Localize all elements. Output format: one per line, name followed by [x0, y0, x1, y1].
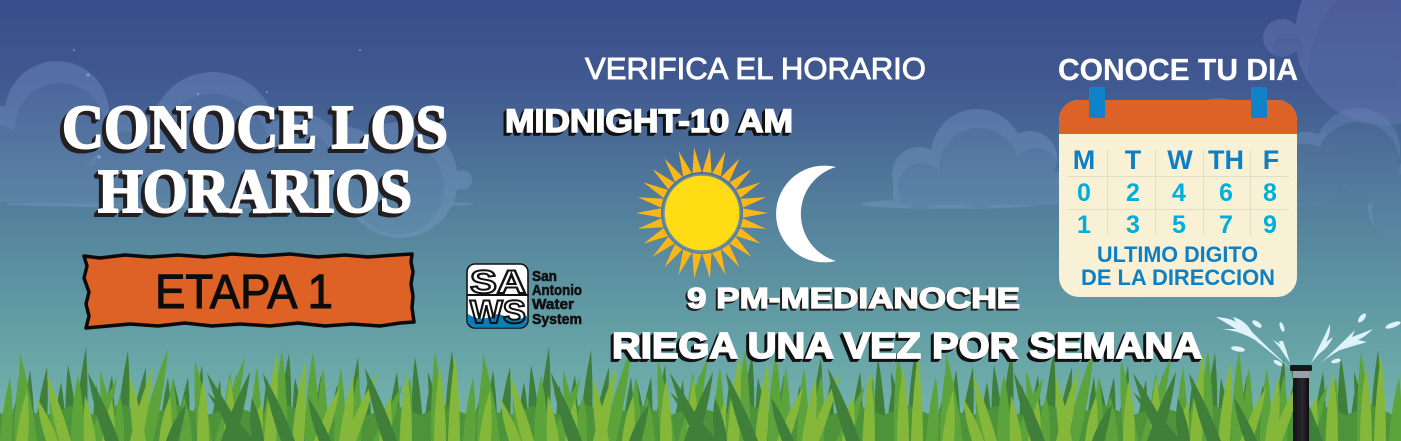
badge shape — [84, 254, 414, 328]
logo wordmark — [532, 268, 582, 328]
digits row one: 0 — [1077, 179, 1091, 207]
digits row two: 1 — [1077, 211, 1091, 239]
title: HORARIOS — [98, 158, 412, 226]
weekday row: W — [1167, 145, 1193, 175]
label: morning hours: MIDNIGHT-10 AM — [505, 103, 793, 139]
logo mark — [467, 264, 528, 330]
cloud: top right — [1263, 0, 1401, 187]
logo mark: WS — [470, 294, 526, 330]
calendar note: ULTIMO DIGITO — [1097, 242, 1258, 267]
icon: moon — [776, 166, 836, 262]
digits row one: 4 — [1172, 179, 1186, 207]
logo mark: SA — [470, 264, 526, 300]
calendar binding rings — [1089, 87, 1267, 118]
logo wordmark: Water — [532, 296, 574, 313]
digits row two: 9 — [1263, 211, 1277, 239]
label: water once a week: RIEGA UNA VEZ POR SEMANA — [612, 325, 1202, 366]
weekday row: F — [1263, 145, 1279, 175]
water spray — [1216, 312, 1401, 371]
digits row one — [1077, 179, 1277, 207]
weekday row: TH — [1208, 145, 1244, 175]
heading: conoce tu dia: CONOCE TU DIA — [1058, 52, 1298, 87]
calendar note — [1081, 242, 1275, 290]
digits row two: 5 — [1172, 211, 1186, 239]
icon: sprinkler — [1216, 312, 1401, 441]
digits row two: 3 — [1126, 211, 1140, 239]
label: evening hours: 9 PM-MEDIANOCHE — [687, 283, 1020, 315]
badge: stage 1 — [84, 254, 414, 328]
logo wordmark: System — [532, 311, 582, 328]
weekday row — [1073, 145, 1279, 175]
calendar — [1059, 87, 1297, 297]
badge text: ETAPA 1 — [155, 266, 333, 319]
digits row two: 7 — [1219, 211, 1233, 239]
digits row one: 6 — [1219, 179, 1233, 207]
title — [62, 94, 448, 226]
digits row one: 8 — [1263, 179, 1277, 207]
icon: sun — [636, 147, 768, 279]
cloud: left — [0, 61, 475, 238]
cloud: centre right — [860, 98, 1261, 209]
logo wordmark: San — [532, 268, 557, 285]
calendar header — [1059, 100, 1297, 134]
digits row one: 2 — [1126, 179, 1140, 207]
digits row two — [1077, 211, 1277, 239]
logo wordmark: Antonio — [532, 282, 582, 299]
cloud: right — [1267, 108, 1401, 256]
stars — [73, 49, 361, 159]
sprinkler post — [1293, 377, 1309, 441]
title: CONOCE LOS — [62, 94, 448, 162]
heading: verifica el horario: VERIFICA EL HORARIO — [585, 51, 926, 86]
logo: San Antonio Water System — [467, 264, 582, 330]
grass — [0, 347, 1401, 441]
weekday row: M — [1073, 145, 1095, 175]
calendar note: DE LA DIRECCION — [1081, 265, 1275, 290]
calendar body — [1059, 100, 1297, 297]
weekday row: T — [1125, 145, 1142, 175]
